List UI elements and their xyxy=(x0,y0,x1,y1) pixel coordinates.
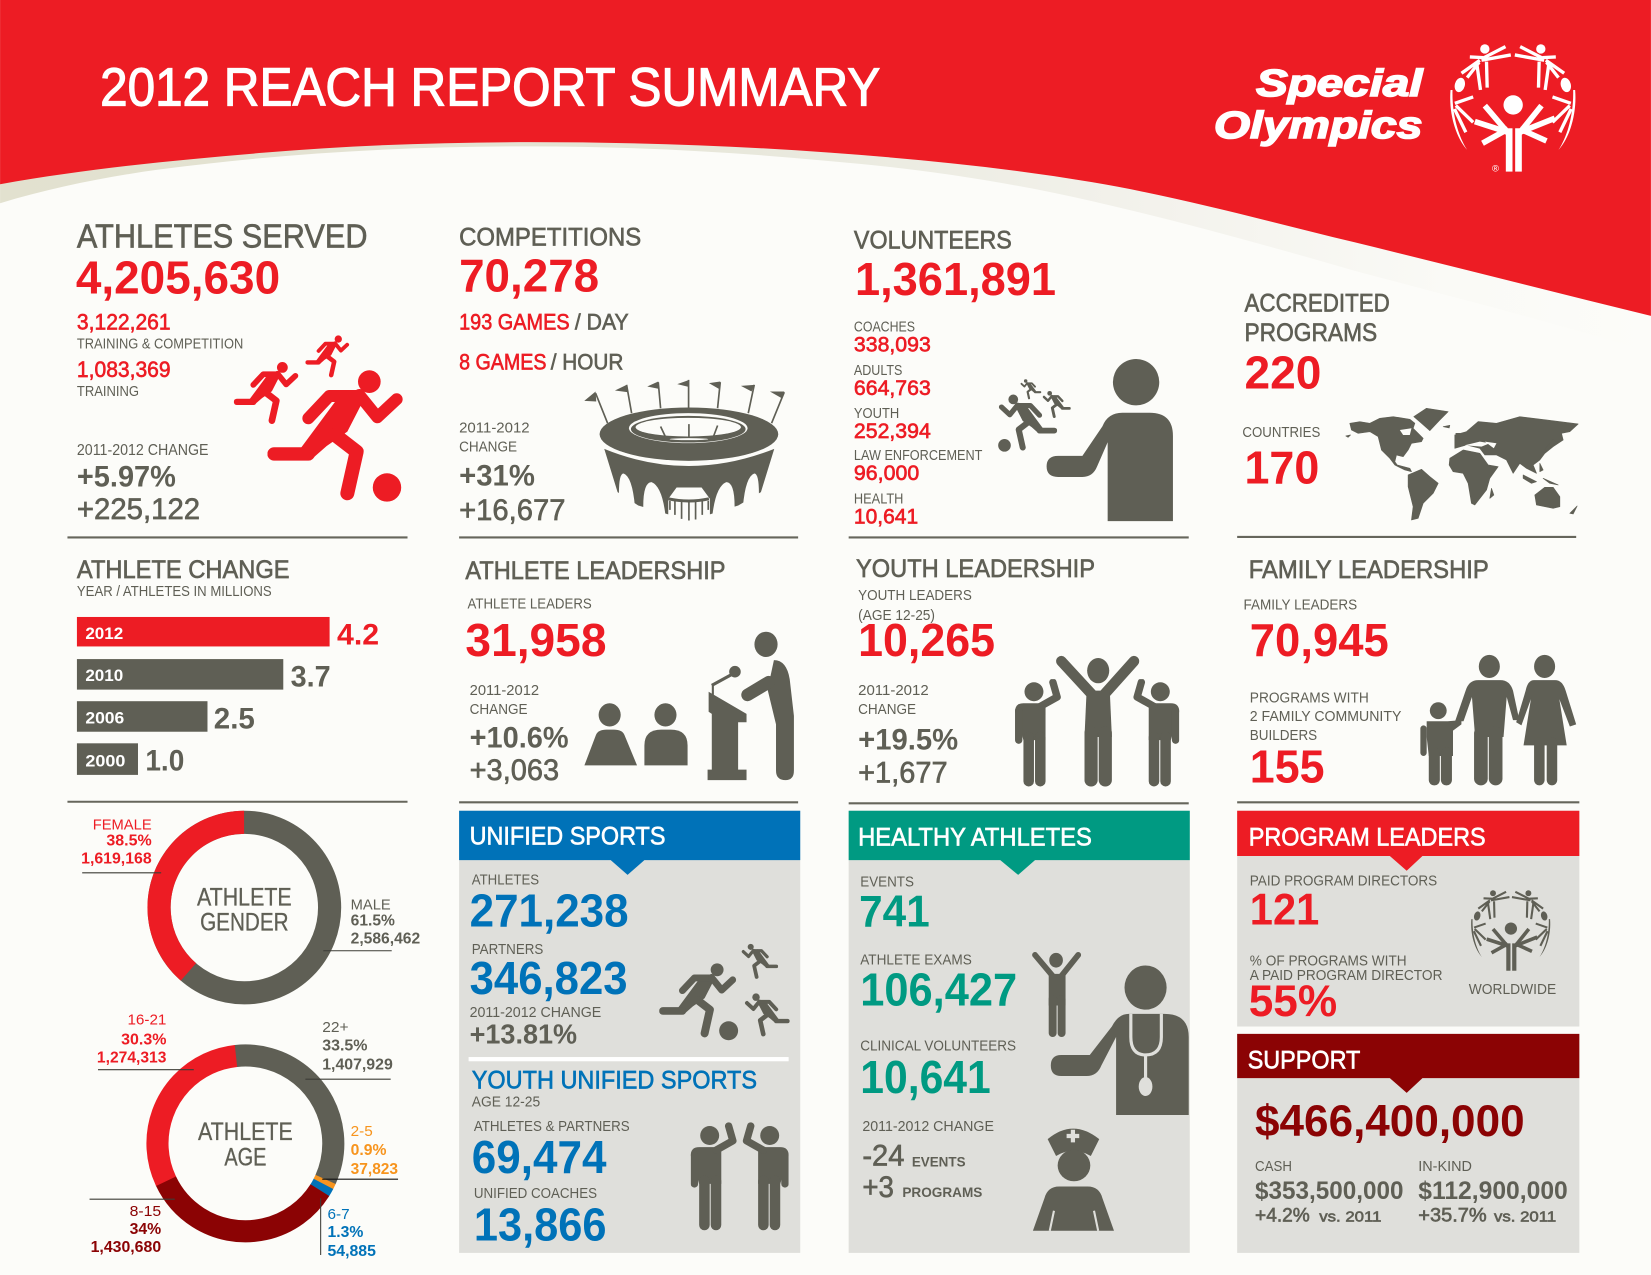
countries: COUNTRIES xyxy=(1242,425,1320,441)
change: 2011-2012 CHANGE xyxy=(862,1119,994,1135)
coaches: COACHES xyxy=(854,320,915,336)
chart label: AGE xyxy=(224,1144,266,1172)
bar: 2000: 2000 xyxy=(85,751,125,770)
bar: 2006 xyxy=(77,701,255,736)
clinical volunteers: CLINICAL VOLUNTEERS xyxy=(860,1039,1016,1055)
header: PROGRAM LEADERS xyxy=(1249,823,1486,851)
bar: 2010 xyxy=(77,659,331,693)
label: 6-7: 54,885 xyxy=(328,1243,376,1260)
adults: 664,763 xyxy=(854,377,931,400)
icon: red athletes xyxy=(237,335,401,502)
athlete leaders: ATHLETE LEADERS xyxy=(468,597,592,613)
panel: athlete leadership xyxy=(465,557,794,787)
label: 8-15: 34% xyxy=(130,1221,162,1238)
title: 2012 REACH REPORT SUMMARY xyxy=(100,57,880,117)
events: EVENTS xyxy=(860,874,914,890)
label: 8-15: 1,430,680 xyxy=(91,1239,161,1256)
change: PROGRAMS xyxy=(902,1185,982,1200)
coaches xyxy=(854,320,931,357)
community builders: BUILDERS xyxy=(1250,728,1317,744)
change xyxy=(459,421,565,527)
athletes and partners: ATHLETES & PARTNERS xyxy=(474,1119,630,1135)
label: 22+: 22+ xyxy=(322,1020,349,1036)
icon: doctor xyxy=(1051,965,1189,1115)
programs total: 220 xyxy=(1245,347,1321,399)
panel: support xyxy=(1237,1034,1579,1253)
panel: volunteers xyxy=(854,226,1173,528)
Special Olympics wordmark xyxy=(1214,63,1424,147)
games per day: / DAY xyxy=(575,310,629,335)
change xyxy=(77,442,209,526)
header xyxy=(459,811,800,875)
change: +3,063 xyxy=(470,754,559,787)
athlete leaders: 31,958 xyxy=(465,614,607,666)
percent with director: % OF PROGRAMS WITH xyxy=(1250,953,1407,969)
change: +31% xyxy=(459,459,535,492)
header: HEALTHY ATHLETES xyxy=(858,823,1092,851)
percent with director: A PAID PROGRAM DIRECTOR xyxy=(1250,968,1442,984)
icon: world map xyxy=(1346,408,1578,520)
partners: 346,823 xyxy=(470,952,628,1004)
athlete exams: 106,427 xyxy=(860,963,1017,1015)
coaches: 338,093 xyxy=(854,334,931,357)
Special Olympics wordmark: Special xyxy=(1256,63,1424,105)
label: 6-7 xyxy=(321,1198,376,1260)
change xyxy=(862,1119,994,1204)
bar: 2006: 2.5 xyxy=(214,703,255,736)
donut chart: age xyxy=(124,1022,367,1265)
change: 2011-2012 xyxy=(470,683,539,699)
label: 16-21: 1,274,313 xyxy=(97,1049,166,1066)
change xyxy=(858,683,958,789)
health: HEALTH xyxy=(854,491,903,507)
health xyxy=(854,491,918,528)
change: 2011-2012 xyxy=(459,421,530,437)
panel: athlete age xyxy=(90,1012,398,1265)
label: 16-21: 30.3% xyxy=(121,1031,167,1048)
community builders xyxy=(1250,690,1402,792)
change: CHANGE xyxy=(459,440,517,456)
adults: ADULTS xyxy=(854,363,903,379)
header xyxy=(849,811,1190,875)
label: 16-21: 16-21 xyxy=(127,1012,166,1028)
paid directors: PAID PROGRAM DIRECTORS xyxy=(1250,873,1437,889)
label: 2-5: 0.9% xyxy=(351,1142,387,1159)
icon: worldwide logo: WORLDWIDE xyxy=(1469,982,1556,998)
panel: family leadership xyxy=(1243,556,1576,792)
icon: stadium xyxy=(584,380,784,523)
label: male: 2,586,462 xyxy=(351,930,420,947)
change: EVENTS xyxy=(912,1155,966,1170)
heading: ATHLETE LEADERSHIP xyxy=(465,557,725,585)
heading: VOLUNTEERS xyxy=(854,226,1012,254)
heading xyxy=(1245,290,1390,347)
youth leaders: YOUTH LEADERS xyxy=(858,588,972,604)
youth leaders xyxy=(858,588,995,666)
bar: 2012 xyxy=(77,617,379,651)
law enforcement: LAW ENFORCEMENT xyxy=(854,448,982,464)
bar: 2012: 4.2 xyxy=(337,618,379,651)
label: 8-15: 8-15 xyxy=(130,1204,161,1220)
bar: 2010: 2010 xyxy=(85,666,123,685)
youth leaders: 10,265 xyxy=(858,614,995,666)
clinical volunteers: 10,641 xyxy=(860,1051,991,1103)
community builders: 2 FAMILY COMMUNITY xyxy=(1250,709,1402,725)
heading: PROGRAMS xyxy=(1245,319,1377,347)
label: 8-15 xyxy=(90,1199,175,1256)
chart label: GENDER xyxy=(200,909,289,937)
cash: $353,500,000 xyxy=(1255,1177,1404,1205)
youth unified heading: AGE 12-25 xyxy=(472,1095,540,1111)
icon: Special Olympics logo: ® xyxy=(1492,164,1499,175)
label: female xyxy=(81,818,161,873)
total competitions: 70,278 xyxy=(459,250,599,302)
change: +3 xyxy=(862,1171,894,1204)
change: +1,677 xyxy=(858,756,948,789)
bar: 2012: 2012 xyxy=(85,624,123,643)
cash xyxy=(1255,1159,1404,1226)
athletes: 271,238 xyxy=(470,885,629,937)
label: 6-7: 6-7 xyxy=(328,1207,350,1223)
heading: COMPETITIONS xyxy=(459,223,641,251)
training: TRAINING xyxy=(77,384,139,400)
header red banner xyxy=(0,0,1651,316)
panel: unified sports xyxy=(459,811,800,1253)
law enforcement: 96,000 xyxy=(854,462,919,485)
change: +10.6% xyxy=(470,722,569,755)
label: 16-21 xyxy=(97,1012,194,1070)
training: 1,083,369 xyxy=(77,357,171,382)
panel: youth leadership xyxy=(856,555,1179,789)
subheading: YEAR / ATHLETES IN MILLIONS xyxy=(77,584,272,600)
in-kind: IN-KIND xyxy=(1418,1159,1472,1175)
bar: 2000: 1.0 xyxy=(145,745,184,778)
community builders: 155 xyxy=(1250,740,1325,792)
panel: accredited programs xyxy=(1242,290,1578,520)
total volunteers: 1,361,891 xyxy=(855,253,1056,305)
chart label: ATHLETE xyxy=(198,1118,293,1146)
youth leaders: (AGE 12-25) xyxy=(858,608,935,624)
family leaders: FAMILY LEADERS xyxy=(1243,598,1357,614)
change: +225,122 xyxy=(77,493,200,526)
header: UNIFIED SPORTS xyxy=(470,822,665,850)
change: 2011-2012 CHANGE xyxy=(77,442,209,459)
bar: 2010: 3.7 xyxy=(291,660,331,693)
games per hour: 8 GAMES xyxy=(459,350,546,375)
label: 2-5: 37,823 xyxy=(351,1161,398,1178)
law enforcement xyxy=(854,448,982,485)
youth unified heading: YOUTH UNIFIED SPORTS xyxy=(472,1067,757,1095)
games per hour: / HOUR xyxy=(551,350,623,375)
percent with director: 55% xyxy=(1249,977,1337,1026)
icon: speaker and audience xyxy=(584,632,794,780)
label: 22+ xyxy=(305,1020,393,1079)
label: male: MALE xyxy=(351,898,391,914)
youth xyxy=(854,406,931,443)
Special Olympics wordmark: Olympics xyxy=(1214,105,1422,147)
cash: CASH xyxy=(1255,1159,1292,1175)
countries: 170 xyxy=(1245,441,1319,493)
total athletes: 4,205,630 xyxy=(76,252,280,304)
athlete exams: ATHLETE EXAMS xyxy=(860,952,972,968)
training xyxy=(77,357,171,400)
icon: volunteer with athletes xyxy=(998,359,1173,521)
change xyxy=(470,1005,601,1049)
change: -24 xyxy=(862,1140,904,1173)
in-kind: +35.7% xyxy=(1418,1205,1487,1226)
partners: PARTNERS xyxy=(472,942,543,958)
heading: FAMILY LEADERSHIP xyxy=(1249,556,1489,584)
change: CHANGE xyxy=(858,702,916,718)
in-kind: $112,900,000 xyxy=(1418,1177,1568,1205)
change: +13.81% xyxy=(470,1018,577,1049)
panel: athlete gender xyxy=(81,787,420,1028)
unified coaches: UNIFIED COACHES xyxy=(474,1186,597,1202)
label: 2-5 xyxy=(322,1124,398,1179)
adults xyxy=(854,363,931,400)
label: female: 38.5% xyxy=(106,832,152,849)
total support: $466,400,000 xyxy=(1255,1097,1525,1146)
youth unified heading xyxy=(472,1067,757,1111)
header xyxy=(1237,1034,1579,1093)
training and competition: TRAINING & COMPETITION xyxy=(77,336,243,352)
icon: worldwide logo xyxy=(1469,890,1556,998)
heading: ATHLETES SERVED xyxy=(77,218,368,255)
chart label: ATHLETE xyxy=(197,883,292,911)
unified coaches: 13,866 xyxy=(474,1198,607,1250)
chart label xyxy=(197,883,292,937)
change xyxy=(470,683,569,787)
cash: +4.2% xyxy=(1255,1205,1310,1226)
heading: ATHLETE CHANGE xyxy=(77,556,290,584)
heading: ACCREDITED xyxy=(1245,290,1390,318)
label: 22+: 1,407,929 xyxy=(322,1057,393,1074)
percent with director xyxy=(1249,953,1442,1026)
youth: 252,394 xyxy=(854,420,931,443)
change: +16,677 xyxy=(459,494,565,527)
panel: athlete change xyxy=(77,556,379,778)
athletes and partners: 69,474 xyxy=(472,1131,607,1183)
icon: family xyxy=(1424,655,1576,785)
change: 2011-2012 xyxy=(858,683,929,699)
icon: nurse xyxy=(1033,1129,1114,1231)
bar: 2000 xyxy=(77,743,184,778)
paid directors xyxy=(1250,873,1437,934)
events: 741 xyxy=(859,888,930,937)
panel: competitions xyxy=(459,223,784,527)
heading: YOUTH LEADERSHIP xyxy=(856,555,1095,583)
in-kind: vs. 2011 xyxy=(1494,1209,1556,1225)
panel: healthy athletes xyxy=(849,811,1190,1253)
header curved band xyxy=(0,139,1651,353)
label: male xyxy=(323,898,420,951)
training and competition xyxy=(77,310,243,352)
training and competition: 3,122,261 xyxy=(77,310,171,335)
panel: program leaders xyxy=(1237,811,1579,1027)
change: +5.97% xyxy=(77,460,176,493)
icon: cheering athlete xyxy=(1035,953,1078,1037)
label: 2-5: 2-5 xyxy=(351,1124,373,1140)
chart label xyxy=(198,1118,293,1172)
family leaders: 70,945 xyxy=(1250,614,1389,666)
header xyxy=(1237,811,1579,871)
icon: youth high five xyxy=(691,1126,789,1230)
athletes: ATHLETES xyxy=(472,872,539,888)
community builders: PROGRAMS WITH xyxy=(1250,690,1369,706)
change: CHANGE xyxy=(470,702,528,718)
youth: YOUTH xyxy=(854,406,899,422)
label: female: 1,619,168 xyxy=(81,850,152,867)
label: 6-7: 1.3% xyxy=(328,1224,364,1241)
label: male: 61.5% xyxy=(351,912,395,929)
icon: three cheering youths xyxy=(1015,658,1179,786)
bar: 2006: 2006 xyxy=(85,708,124,727)
label: female: FEMALE xyxy=(93,818,152,834)
health: 10,641 xyxy=(854,505,918,528)
label: 22+: 33.5% xyxy=(322,1038,368,1055)
cash: vs. 2011 xyxy=(1319,1209,1381,1225)
in-kind xyxy=(1418,1159,1568,1226)
change: 2011-2012 CHANGE xyxy=(470,1005,601,1021)
paid directors: 121 xyxy=(1250,885,1319,934)
icon: Special Olympics logo xyxy=(1450,44,1575,175)
games per day: 193 GAMES xyxy=(459,310,570,335)
change: +19.5% xyxy=(858,724,958,757)
games per hour xyxy=(459,350,623,375)
header: SUPPORT xyxy=(1248,1047,1360,1075)
panel: athletes served xyxy=(76,218,401,526)
icon: unified athletes xyxy=(663,944,788,1040)
donut chart: gender xyxy=(124,787,365,1028)
